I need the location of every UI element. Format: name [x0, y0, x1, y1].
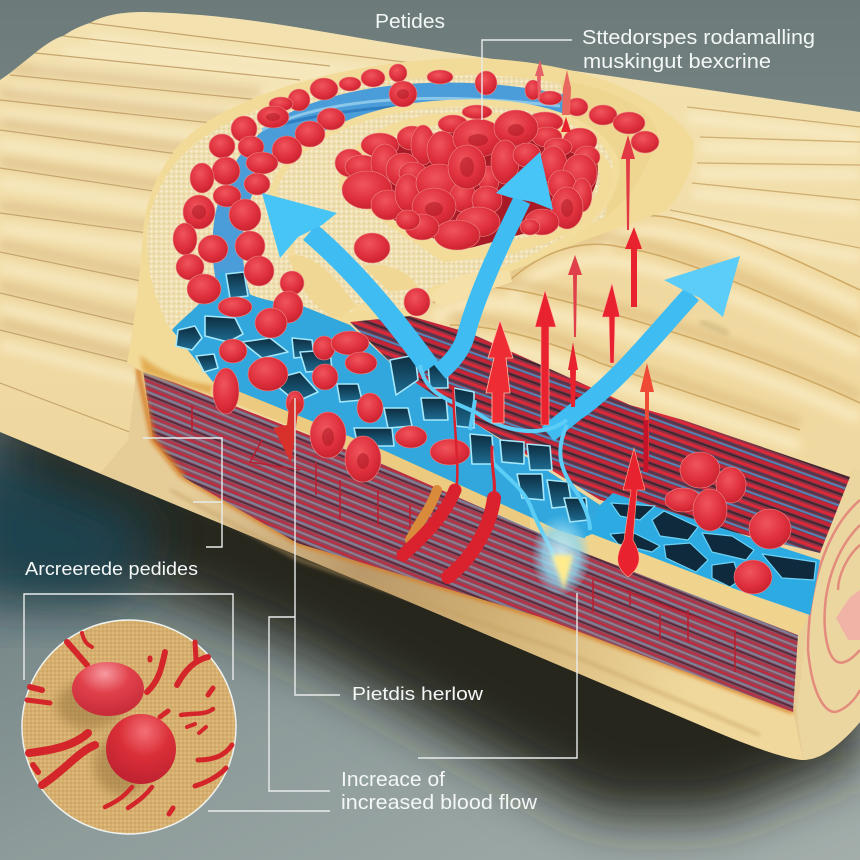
label: increased blood flow: Increace of [341, 769, 445, 791]
inset red cells [72, 662, 176, 784]
blue hex network, left [172, 270, 600, 540]
thin red peptide worms [403, 387, 494, 577]
cell dimples [192, 89, 573, 469]
front muscle layer [138, 368, 798, 712]
label: Petides: Petides [375, 11, 445, 33]
label: Pietdis herlow: Pietdis herlow [352, 684, 484, 704]
flare at vessel junction [531, 510, 591, 594]
label: increased blood flow [341, 769, 538, 814]
arrow: upper left [262, 193, 430, 368]
left ribs [0, 23, 420, 437]
cavity rim [127, 58, 694, 463]
red peptide arrows [273, 60, 654, 577]
label: Arcreerede pedides: Arcreerede pedides [25, 559, 198, 579]
cream lip [210, 381, 808, 635]
inner lobe [273, 103, 616, 318]
blue vessel band [227, 98, 565, 300]
blue arrows [262, 152, 740, 565]
pool of red cells [345, 118, 607, 256]
right ribs [670, 107, 860, 258]
blue hex network, right [585, 493, 820, 615]
end face with rings [797, 467, 860, 760]
label: top right callout: muskingut bexcrine [583, 51, 771, 73]
inset circle magnified view [22, 620, 236, 834]
red blood cells [173, 64, 791, 594]
middle muscle layer [350, 316, 850, 553]
cell shadows [56, 681, 150, 795]
label: increased blood flow: increased blood flow [341, 792, 538, 814]
right lobes [432, 215, 860, 452]
label: top right callout [582, 27, 815, 73]
vessel branches [420, 365, 590, 565]
red fibres [27, 633, 232, 814]
sandy cavity interior [147, 75, 658, 330]
arrow: upper centre [440, 152, 553, 372]
cell cluster base [347, 129, 598, 248]
arrow: right [548, 256, 740, 434]
callout leader lines [24, 40, 577, 811]
label: top right callout: Sttedorspes rodamalling [582, 27, 815, 49]
lower outer band [100, 367, 803, 760]
